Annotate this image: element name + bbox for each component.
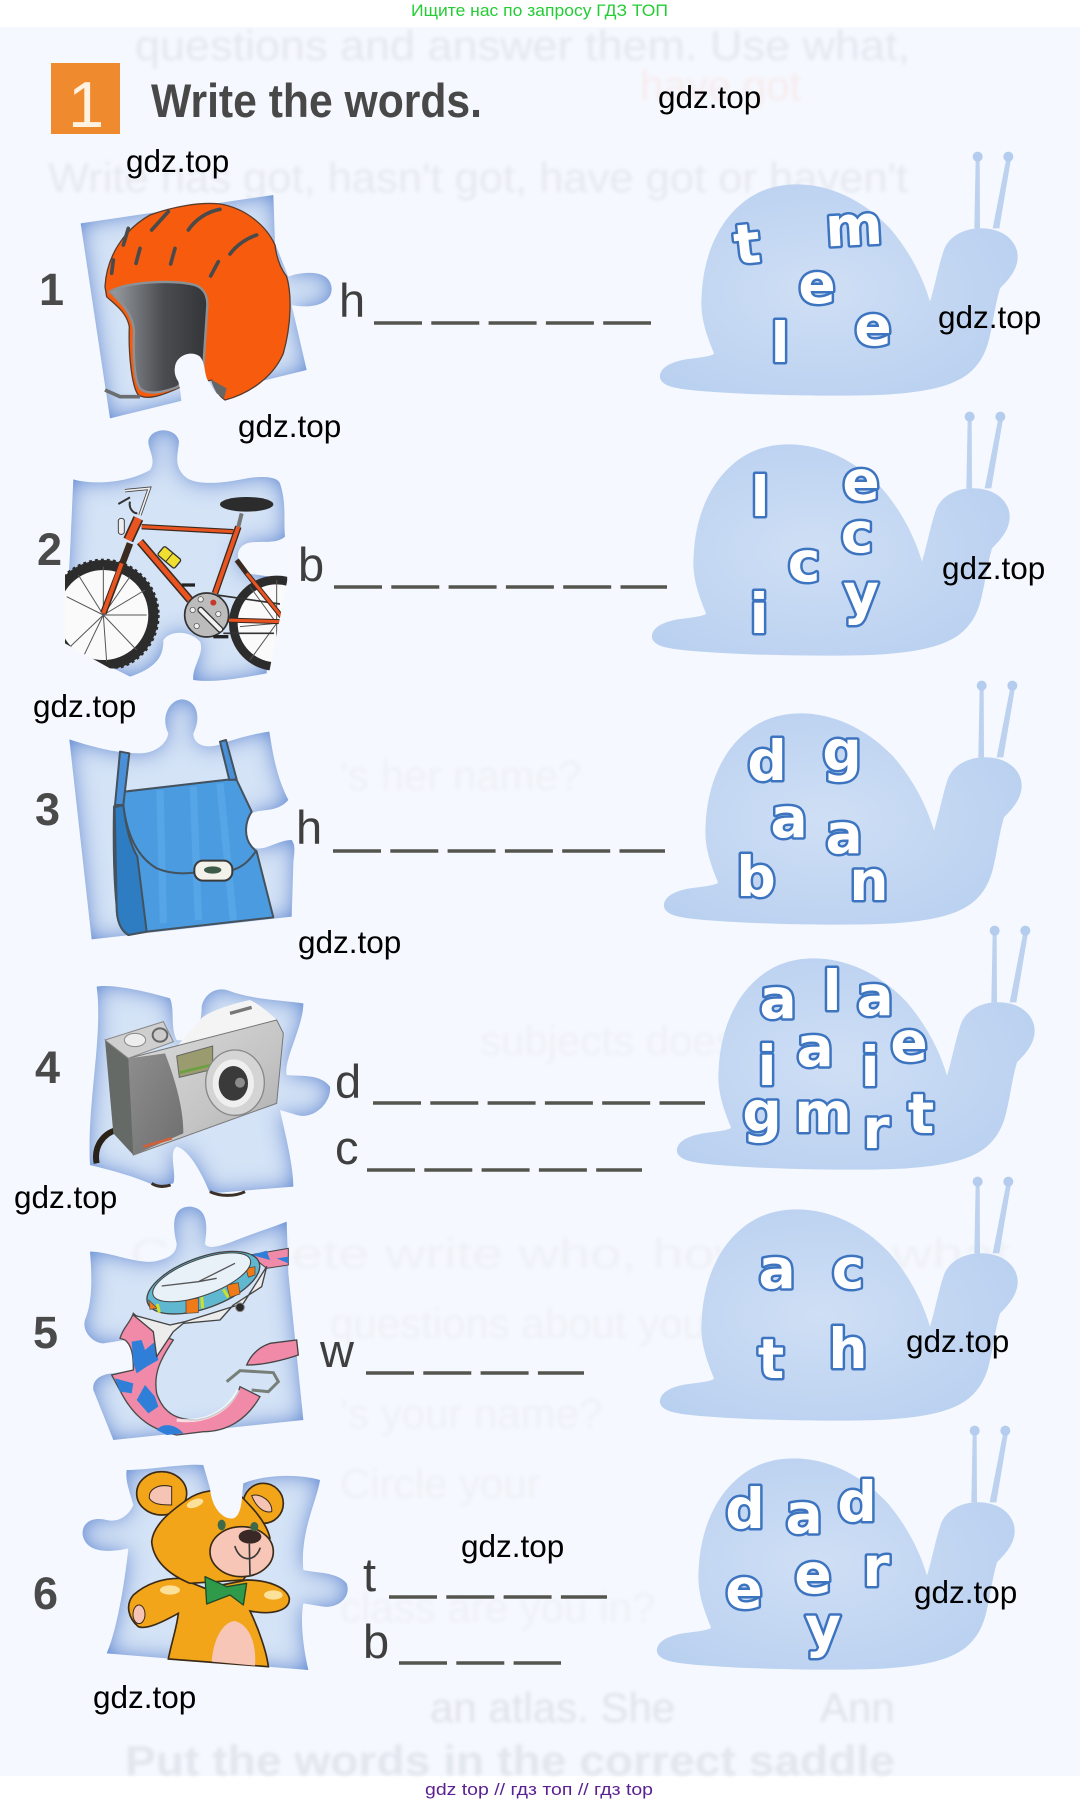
snail 3 with letters: a: [825, 802, 863, 866]
snail 1 with letters: [660, 152, 1018, 396]
snail 2 with letters: e: [842, 449, 880, 513]
heading: Write the words.: [151, 74, 482, 127]
show-through text from the reverse page: an atlas. She: [430, 1684, 675, 1731]
snail 2 with letters: c: [841, 501, 873, 565]
snail 2 with letters: y: [843, 562, 879, 626]
snail 6 with letters: r: [862, 1535, 890, 1599]
snail 1 with letters: l: [771, 311, 789, 375]
snail 2 with letters: i: [750, 582, 768, 646]
show-through text from the reverse page: Ann: [820, 1684, 895, 1731]
snail 3 with letters: g: [822, 719, 862, 783]
snail 1 with letters: t: [731, 211, 763, 277]
watermarks: gdz.top: [33, 688, 136, 724]
exercise number badge: [51, 63, 120, 141]
snail 4 with letters: [677, 926, 1035, 1170]
watermarks: gdz.top: [461, 1528, 564, 1564]
snail 6 with letters: d: [725, 1477, 765, 1541]
icon: teddy bear puzzle piece: [83, 1465, 348, 1670]
watermarks: gdz.top: [14, 1179, 117, 1215]
show-through text from the reverse page: questions and answer them. Use what,: [135, 22, 910, 69]
snail 4 with letters: g: [742, 1080, 782, 1144]
snail 4 with letters: e: [890, 1010, 928, 1074]
footer text: gdz top // гдз топ // гдз top: [425, 1780, 653, 1799]
snail 5 with letters: [660, 1177, 1018, 1421]
show-through text from the reverse page: 's her name?: [340, 752, 581, 799]
snail 6 with letters: y: [805, 1595, 841, 1659]
snail 4 with letters: a: [759, 967, 797, 1031]
show-through text from the reverse page: Write has got, hasn't got, have got or haven't: [48, 154, 908, 201]
show-through text from the reverse page: questions about yourself: [330, 1300, 786, 1347]
snail 4 with letters: i: [861, 1035, 879, 1099]
row 4 number: 4: [35, 1042, 60, 1093]
icon: bag puzzle piece: [69, 699, 294, 939]
icon: watch puzzle piece: [84, 1207, 303, 1440]
answer row 1: h: [339, 274, 365, 327]
show-through text from the reverse page: Complete write who, how, and what: [130, 1230, 1010, 1277]
watermarks: gdz.top: [942, 550, 1045, 586]
show-through text from the reverse page: Circle your: [340, 1460, 541, 1507]
snail 5 with letters: h: [828, 1317, 868, 1381]
snail 4 with letters: r: [862, 1097, 890, 1161]
snail 6 with letters: e: [794, 1542, 832, 1606]
top banner text: Ищите нас по запросу ГДЗ ТОП: [411, 1, 668, 20]
snail 4 with letters: a: [796, 1015, 834, 1079]
snail 3 with letters: a: [770, 786, 808, 850]
snail 4 with letters: i: [758, 1034, 776, 1098]
snail 5 with letters: c: [832, 1237, 864, 1301]
answer row 4: [335, 1055, 705, 1174]
snail 6 with letters: a: [785, 1482, 823, 1546]
snail 2 with letters: [652, 412, 1010, 656]
watermarks: gdz.top: [938, 299, 1041, 335]
snail 3 with letters: d: [747, 729, 787, 793]
snail 3 with letters: [664, 681, 1022, 925]
snail 2 with letters: c: [788, 530, 820, 594]
snail 5 with letters: t: [758, 1327, 784, 1391]
snail 2 with letters: l: [751, 465, 769, 529]
answer row 3: h: [296, 801, 322, 854]
show-through text from the reverse page: have got: [640, 62, 801, 109]
show-through text from the reverse page: class are you in?: [340, 1584, 655, 1631]
row 5 number: 5: [33, 1307, 58, 1358]
row 1 number: 1: [39, 264, 64, 315]
exercise number badge: 1: [68, 68, 104, 141]
snail 6 with letters: e: [725, 1557, 763, 1621]
snail 3 with letters: n: [849, 849, 889, 913]
snail 4 with letters: m: [794, 1081, 852, 1145]
snail 1 with letters: e: [798, 252, 836, 316]
watermarks: gdz.top: [658, 79, 761, 115]
answer row 2: b: [298, 538, 324, 591]
watermarks: gdz.top: [238, 408, 341, 444]
row 2 number: 2: [37, 524, 62, 575]
watermarks: gdz.top: [126, 143, 229, 179]
snail 1 with letters: e: [854, 294, 892, 358]
watermarks: gdz.top: [93, 1679, 196, 1715]
show-through text from the reverse page: Put the words in the correct saddle: [125, 1737, 895, 1784]
answer row 4: c: [335, 1121, 358, 1174]
snail 1 with letters: m: [824, 193, 884, 259]
snail 3 with letters: b: [736, 845, 776, 909]
answer row 6: b: [363, 1615, 389, 1668]
snail 4 with letters: a: [856, 964, 894, 1028]
answer row 4: d: [335, 1055, 361, 1108]
answer row 5: w: [319, 1324, 355, 1377]
watermarks: gdz.top: [298, 924, 401, 960]
row 3 number: 3: [35, 784, 60, 835]
row 6 number: 6: [33, 1568, 58, 1619]
show-through text from the reverse page: subjects does: [480, 1017, 737, 1064]
icon: camera puzzle piece: [90, 986, 330, 1195]
snail 6 with letters: [657, 1426, 1015, 1670]
watermarks: gdz.top: [906, 1323, 1009, 1359]
snail 5 with letters: a: [758, 1237, 796, 1301]
icon: bicycle puzzle piece: [65, 430, 288, 681]
snail 4 with letters: l: [823, 959, 841, 1023]
snail 6 with letters: d: [837, 1470, 877, 1534]
answer row 6: [363, 1548, 607, 1668]
snail 4 with letters: t: [908, 1082, 934, 1146]
icon: helmet puzzle piece: [81, 195, 332, 418]
show-through text from the reverse page: 's your name?: [340, 1390, 602, 1437]
watermarks: gdz.top: [914, 1574, 1017, 1610]
answer row 6: t: [363, 1548, 376, 1601]
